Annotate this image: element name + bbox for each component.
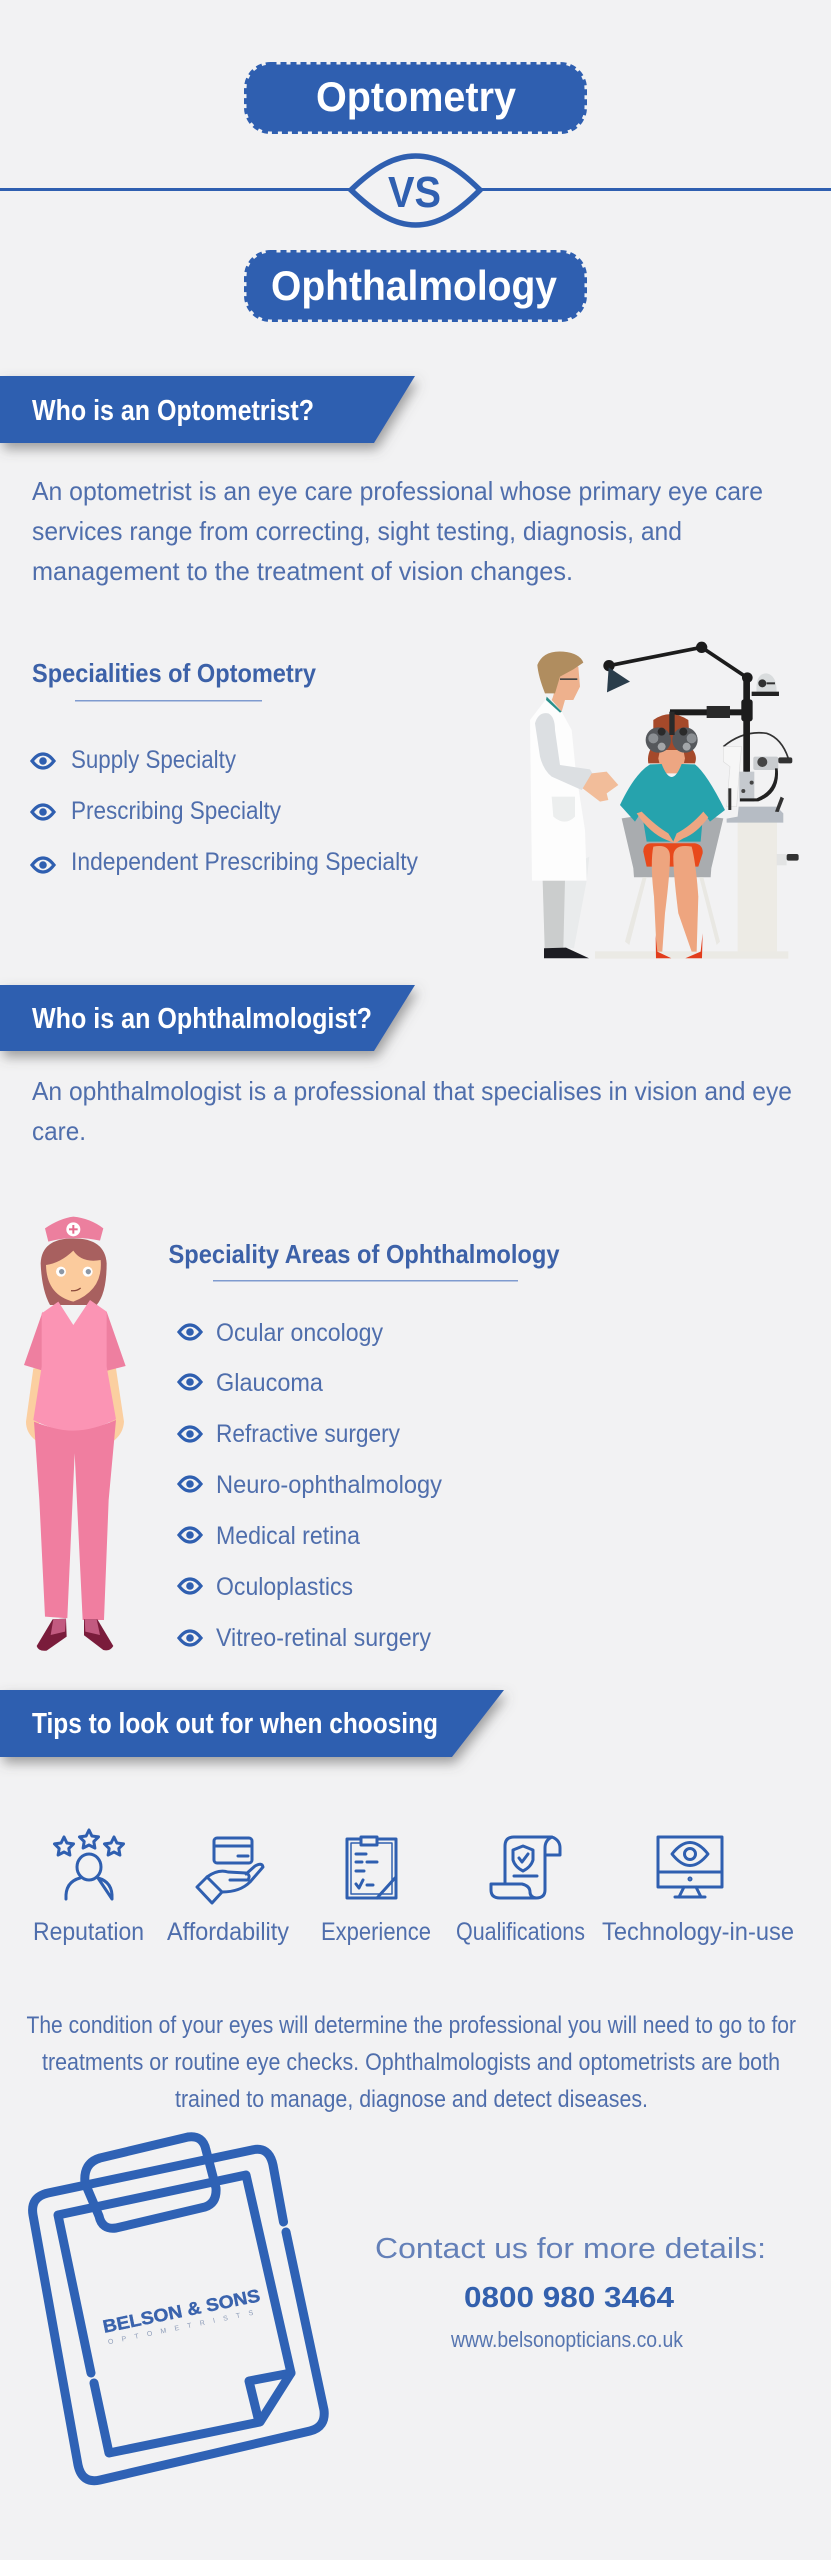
equipment table bbox=[727, 807, 799, 952]
text block: closing paragraph bbox=[26, 2012, 796, 2113]
contact block: www.belsonopticians.co.uk bbox=[450, 2327, 684, 2352]
text block: ophthalmologist definition: care. bbox=[32, 1116, 86, 1146]
patient bbox=[620, 712, 725, 958]
icon: experience bbox=[347, 1837, 396, 1898]
face bbox=[46, 1251, 101, 1302]
title: Optometry badge: Optometry bbox=[316, 73, 517, 120]
contact block bbox=[375, 2233, 766, 2352]
heading banner: Who is an Ophthalmologist?: Who is an Ophthalmologist? bbox=[32, 1003, 372, 1035]
text block: closing paragraph: trained to manage, diagnose and detect diseases. bbox=[175, 2086, 648, 2113]
title: Ophthalmology badge bbox=[246, 252, 586, 320]
left shoe bbox=[37, 1619, 67, 1651]
panel: speciality areas of ophthalmology bbox=[168, 1239, 560, 1652]
text block: optometrist definition: management to the treatment of vision changes. bbox=[32, 556, 573, 586]
list item: neuro-ophthalmology: Neuro-ophthalmology bbox=[216, 1471, 442, 1499]
doctor bbox=[530, 651, 618, 958]
list item: supply specialty: Supply Specialty bbox=[71, 746, 236, 774]
list item: glaucoma: Glaucoma bbox=[216, 1369, 323, 1397]
illustration: optometrist examining patient bbox=[530, 642, 799, 959]
list item: prescribing specialty: Prescribing Specialty bbox=[71, 797, 281, 825]
contact block: 0800 980 3464 bbox=[464, 2282, 674, 2314]
slit lamp bbox=[723, 733, 792, 812]
text block: optometrist definition: services range from correcting, sight testing, diagnosis, and bbox=[32, 516, 682, 546]
icon: affordability bbox=[197, 1838, 263, 1903]
text block: optometrist definition bbox=[32, 476, 763, 586]
illustration: nurse bbox=[24, 1217, 126, 1651]
list item: vitreo-retinal surgery: Vitreo-retinal surgery bbox=[216, 1624, 431, 1652]
pants bbox=[34, 1420, 116, 1620]
title: Optometry badge bbox=[246, 64, 586, 132]
list item: ocular oncology: Ocular oncology bbox=[216, 1319, 383, 1347]
label: qualifications: Qualifications bbox=[456, 1918, 585, 1946]
icon: reputation bbox=[54, 1830, 124, 1899]
clipboard outline bbox=[33, 2137, 324, 2481]
text block: ophthalmologist definition: An ophthalmologist is a professional that specialises in vision and eye bbox=[32, 1076, 792, 1106]
list item: medical retina: Medical retina bbox=[216, 1522, 360, 1550]
logo: BELSON & SONS bbox=[101, 2285, 262, 2337]
text block: ophthalmologist definition bbox=[32, 1076, 792, 1146]
VS divider with eye bbox=[0, 156, 831, 225]
icon: clipboard with logo bbox=[33, 2137, 324, 2481]
VS divider with eye: VS bbox=[388, 168, 441, 217]
sleeves bbox=[24, 1312, 126, 1372]
label: affordability: Affordability bbox=[167, 1918, 289, 1946]
heading banner: Tips to look out for when choosing: Tips to look out for when choosing bbox=[32, 1708, 438, 1740]
heading banner: Who is an Optometrist?: Who is an Optometrist? bbox=[32, 395, 314, 427]
title: Ophthalmology badge: Ophthalmology bbox=[271, 262, 558, 309]
icon: technology bbox=[658, 1837, 722, 1897]
label: reputation: Reputation bbox=[33, 1918, 144, 1946]
subheading: Specialities of Optometry bbox=[32, 658, 316, 688]
right shoe bbox=[84, 1619, 113, 1650]
label: experience: Experience bbox=[321, 1918, 431, 1946]
heading banner: Who is an Optometrist? bbox=[0, 376, 415, 443]
logo: OPTOMETRISTS bbox=[108, 2308, 262, 2346]
lamp arm and shade bbox=[603, 642, 779, 772]
heading banner: Tips to look out for when choosing bbox=[0, 1690, 504, 1757]
icon: qualifications bbox=[491, 1837, 560, 1898]
hair bbox=[41, 1238, 107, 1305]
floor bbox=[595, 951, 788, 959]
list item: oculoplastics: Oculoplastics bbox=[216, 1573, 353, 1601]
text block: optometrist definition: An optometrist is an eye care professional whose primary eye care bbox=[32, 476, 763, 506]
cap bbox=[45, 1217, 103, 1242]
subheading: Speciality Areas of Ophthalmology bbox=[168, 1239, 560, 1269]
scrub top bbox=[33, 1300, 116, 1431]
panel: specialities of optometry bbox=[32, 658, 418, 876]
contact block: Contact us for more details: bbox=[375, 2233, 766, 2265]
label: technology-in-use: Technology-in-use bbox=[602, 1918, 794, 1946]
arms bbox=[26, 1368, 124, 1441]
list item: refractive surgery: Refractive surgery bbox=[216, 1420, 400, 1448]
list item: independent prescribing specialty: Independent Prescribing Specialty bbox=[71, 848, 418, 876]
heading banner: Who is an Ophthalmologist? bbox=[0, 985, 415, 1051]
